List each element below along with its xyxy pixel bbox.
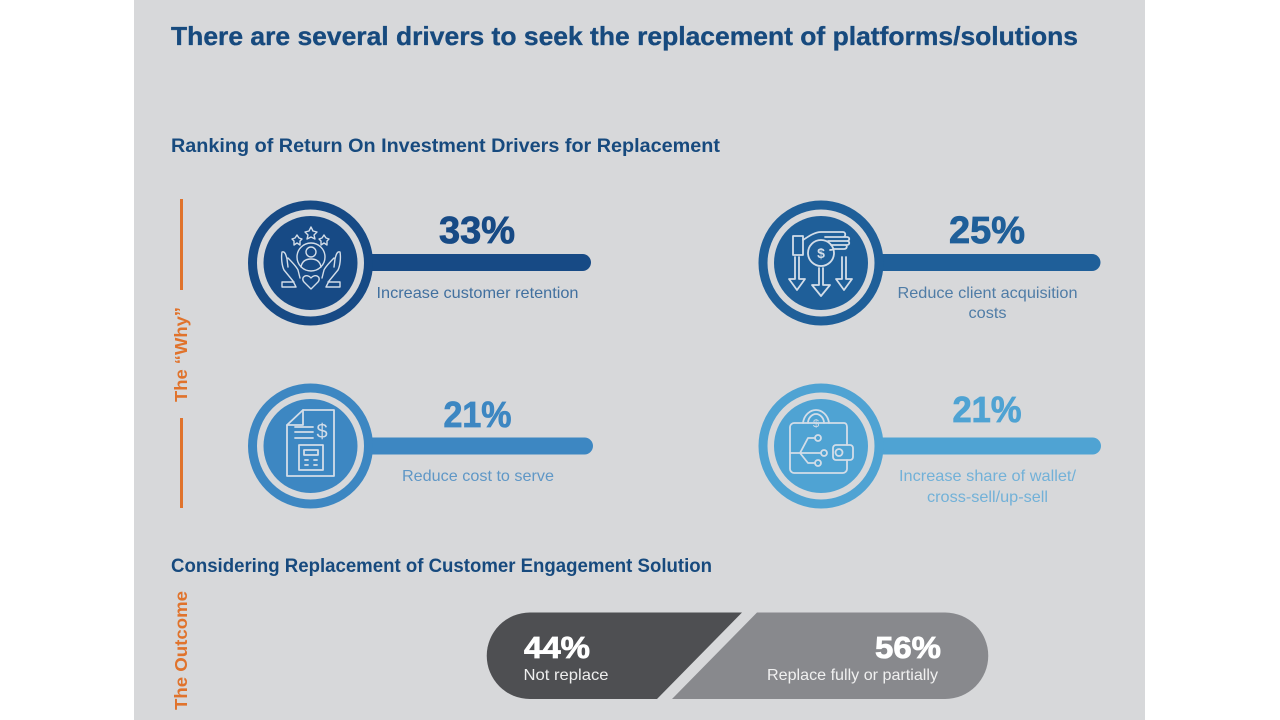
icon: document with calculator [287, 410, 334, 476]
label: Not replace [524, 667, 609, 684]
heading: considering replacement: Considering Replacement of Customer Engagement Solution [171, 556, 712, 577]
driver: reduce cost to serve [252, 388, 593, 504]
value: 33% [439, 210, 515, 252]
label: Reduce cost to serve [402, 468, 554, 485]
value: 44% [524, 630, 590, 665]
side label: The Outcome: The Outcome [171, 591, 191, 710]
driver: increase customer retention [252, 205, 591, 321]
value: 21% [444, 394, 512, 435]
icon: document with calculator: $ [316, 421, 328, 443]
background panel [134, 0, 1145, 720]
value: 21% [952, 389, 1022, 430]
label: Reduce client acquisition [898, 285, 1078, 302]
label: cross-sell/up-sell [927, 489, 1048, 506]
icon: hand with coin and down arrows [789, 232, 852, 296]
driver: reduce client acquisition costs [763, 205, 1100, 322]
icon: hand with coin and down arrows: $ [817, 245, 825, 261]
outcome pill: replace fully or partially [672, 612, 988, 699]
label: Increase share of wallet/ [899, 468, 1077, 485]
label [899, 468, 1077, 506]
outcome pill: not replace [487, 612, 742, 699]
value: 25% [949, 210, 1025, 252]
side label: The Why [171, 199, 191, 508]
label [898, 285, 1078, 322]
driver: increase share of wallet [763, 388, 1101, 506]
value: 56% [875, 630, 941, 665]
title: There are several drivers to seek the replacement of platforms/solutions [171, 21, 1078, 51]
icon: wallet with coin and branches: $ [813, 418, 819, 430]
side label: The Why: The “Why” [171, 307, 191, 402]
label: costs [968, 305, 1006, 322]
label: Increase customer retention [376, 285, 578, 302]
label: Replace fully or partially [767, 667, 938, 684]
heading: ranking of ROI drivers: Ranking of Return On Investment Drivers for Replacement [171, 136, 721, 157]
icon: hands holding customer [282, 227, 340, 289]
icon: wallet with coin and branches [790, 410, 853, 473]
